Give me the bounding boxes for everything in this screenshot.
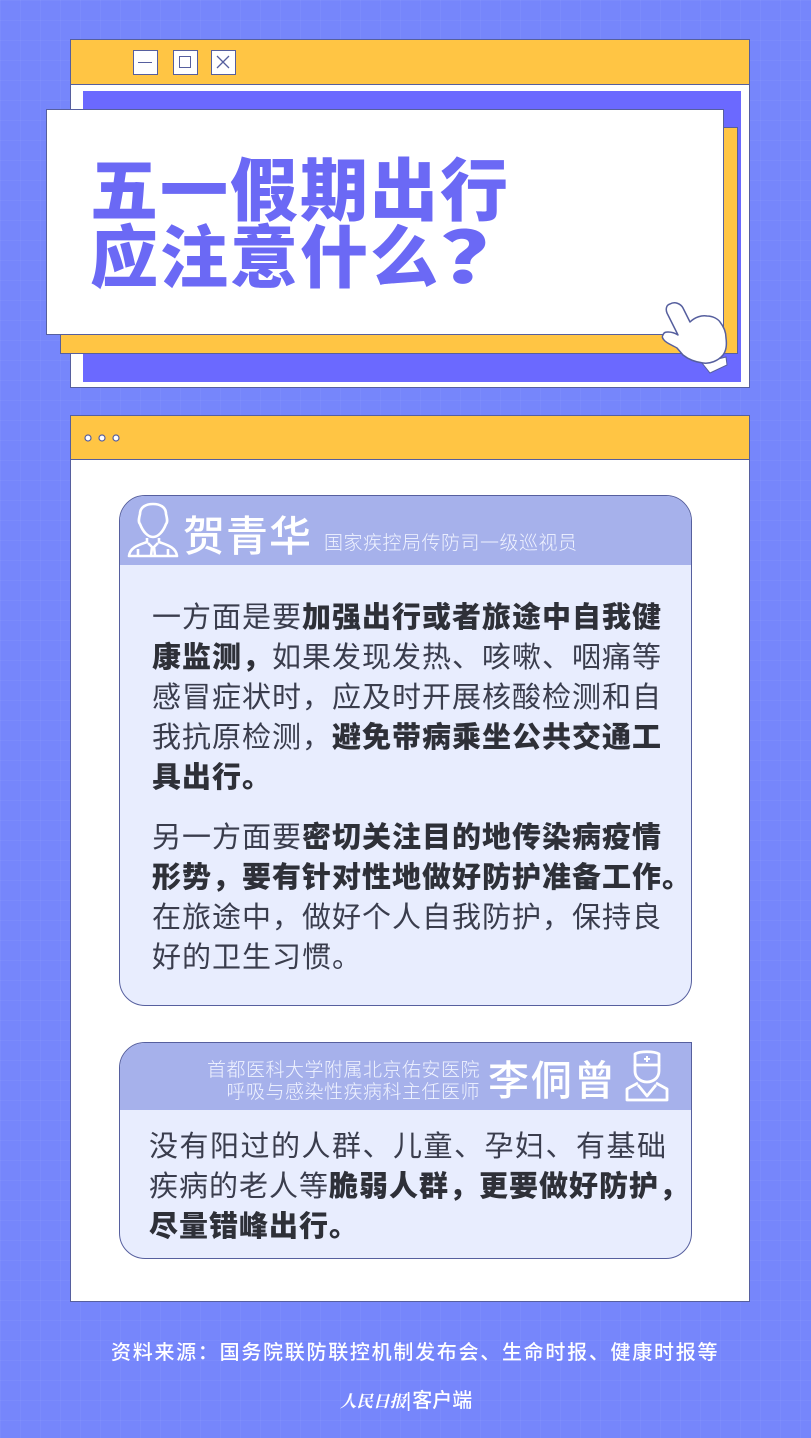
source note: 资料来源：国务院联防联控机制发布会、生命时报、健康时报等 [111,1342,719,1364]
logo: People's Daily client: 人民日报|客户端 [340,1388,472,1412]
body text: Li Tongzeng [149,1131,689,1243]
purple shadow block [83,91,741,382]
panel: Li Tongzeng [119,1042,692,1259]
He Qinghua header band [120,496,691,565]
title: Li Tongzeng: 呼吸与感染性疾病科主任医师 [226,1082,480,1103]
body text: He Qinghua: 好的卫生习惯。 [152,942,362,974]
body text: He Qinghua: 在旅途中，做好个人自我防护，保持良 [152,902,662,934]
body text: He Qinghua: 另一方面要密切关注目的地传染病疫情 [152,822,662,854]
title: 应注意什么 [90,221,440,297]
title: Li Tongzeng: 首都医科大学附属北京佑安医院 [207,1060,480,1081]
body text: Li Tongzeng: 尽量错峰出行。 [149,1211,359,1243]
title: Li Tongzeng [207,1060,480,1103]
maximize button [173,50,198,75]
title: He Qinghua: 国家疾控局传防司一级巡视员 [324,533,578,554]
body text: He Qinghua: 具出行。 [152,762,272,794]
body text: He Qinghua: 一方面是要加强出行或者旅途中自我健 [152,602,662,634]
body text: He Qinghua: 形势，要有针对性地做好防护准备工作。 [152,862,692,894]
icon: pointing hand [662,302,728,374]
body text: He Qinghua: 我抗原检测，避免带病乘坐公共交通工 [152,722,662,754]
close button [211,50,236,75]
body text: He Qinghua [152,602,692,974]
title bar dots [84,434,120,442]
panel: He Qinghua [119,495,692,1006]
minimize button [133,50,158,75]
title: ？ [440,219,538,299]
title card [46,109,724,335]
top window title bar [70,39,750,85]
icon: doctor [626,1050,668,1102]
Li Tongzeng header band [120,1043,691,1110]
body text: Li Tongzeng: 疾病的老人等脆弱人群，更要做好防护， [149,1171,689,1203]
name: He Qinghua: 贺青华 [183,513,312,560]
content title bar [70,415,750,460]
name: Li Tongzeng: 李侗曾 [488,1058,617,1104]
title [90,154,538,299]
yellow shadow block [60,127,738,354]
content window panel [70,415,750,1302]
title: 五一假期出行 [90,154,510,230]
body text: He Qinghua: 康监测，如果发现发热、咳嗽、咽痛等 [152,642,662,674]
icon: person in suit [128,502,178,558]
body text: Li Tongzeng: 没有阳过的人群、儿童、孕妇、有基础 [149,1131,668,1163]
body text: He Qinghua: 感冒症状时，应及时开展核酸检测和自 [152,682,662,714]
top window panel [70,39,750,388]
